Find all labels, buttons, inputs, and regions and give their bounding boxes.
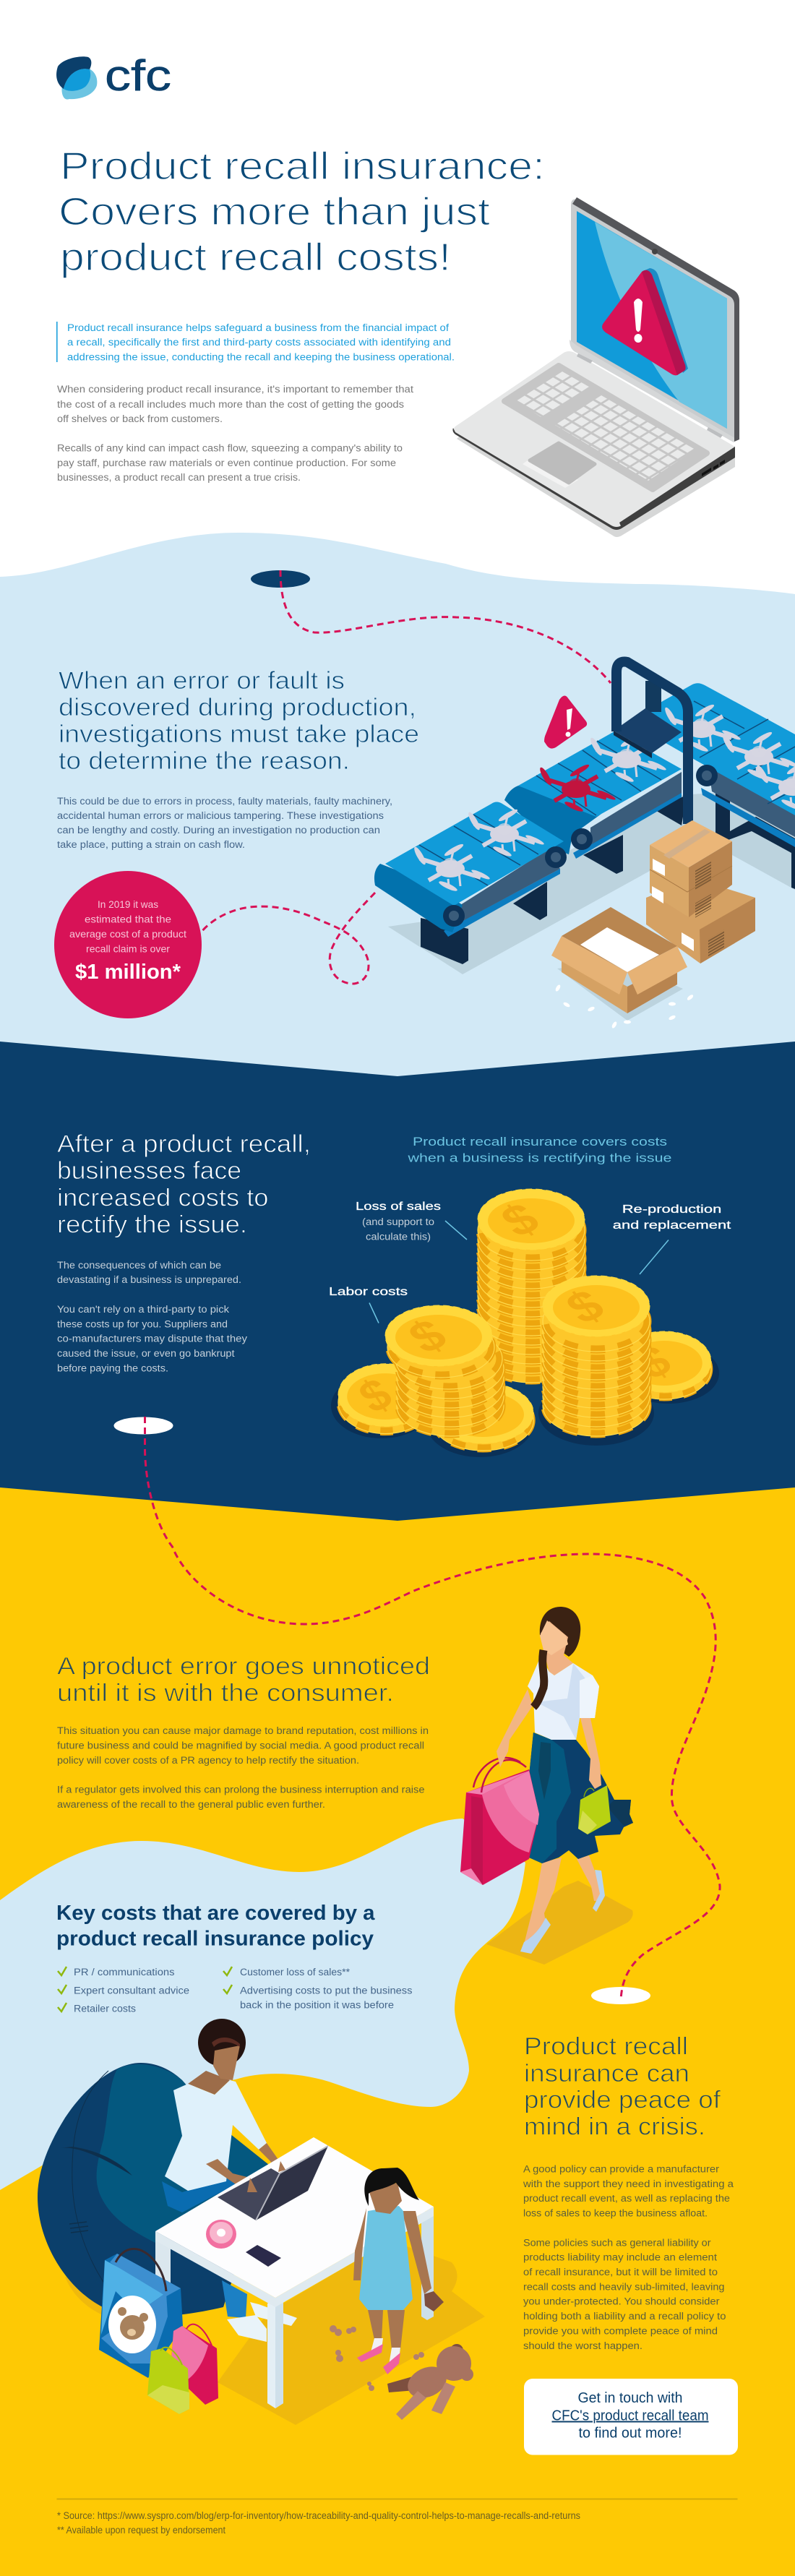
- body: reputation damage text: policy will cover costs of a PR agency to help rectify the situation.: [57, 1755, 359, 1766]
- body: investigation text: can be lengthy and costly. During an investigation no production can: [57, 825, 380, 836]
- mother shirt: [165, 2080, 267, 2191]
- dashed route: conveyor to cost callout: [201, 893, 375, 984]
- label: loss of sales: calculate this): [366, 1232, 431, 1242]
- body: policy text: provide you with complete peace of mind: [523, 2326, 718, 2336]
- light blue blob behind key costs: [0, 1819, 525, 2190]
- heading: product error: A product error goes unnoticed: [57, 1652, 430, 1680]
- mother legs and shoes: [162, 2178, 297, 2342]
- intro body text: the cost of a recall includes much more than the cost of getting the goods: [57, 399, 404, 410]
- intro body text: pay staff, purchase raw materials or even continue production. For some: [57, 458, 396, 468]
- body: policy text: holding both a liability and a recall policy to: [523, 2311, 726, 2322]
- body: consequences text: devastating if a business is unprepared.: [57, 1274, 241, 1285]
- body: investigation text: take place, putting a strain on cash flow.: [57, 839, 245, 850]
- body: reputation damage text: This situation you can cause major damage to brand reputation, cost millions in: [57, 1725, 429, 1736]
- heading: error or fault: discovered during production,: [59, 694, 416, 721]
- body: policy text: of recall insurance, but it will be limited to: [523, 2267, 718, 2277]
- heading: error or fault: When an error or fault is: [59, 667, 345, 695]
- mother arms: [206, 2143, 285, 2192]
- table: [155, 2137, 434, 2408]
- heading: product error: [57, 1652, 430, 1707]
- body: policy text: Some policies such as general liability or: [523, 2238, 711, 2248]
- child: [353, 2168, 444, 2374]
- checklist: key costs: Expert consultant advice: [74, 1985, 189, 1996]
- dashed route: from navy hole to conveyor: [251, 570, 611, 683]
- body: consequences text: [57, 1260, 247, 1373]
- title: Product recall insurance:: [60, 145, 545, 188]
- left coin stack: [385, 1305, 504, 1436]
- callout: $1 million: recall claim is over: [86, 943, 170, 954]
- label: re-production and replacement: Re-production: [622, 1203, 721, 1216]
- body: reputation damage text: [57, 1725, 429, 1810]
- intro body text: off shelves or back from customers.: [57, 413, 223, 424]
- callout: $1 million: $1 million*: [75, 961, 181, 984]
- illustration: conveyor line and boxes: [374, 662, 795, 1029]
- illustration: woman with shopping bags: [460, 1607, 633, 1954]
- body: consequences text: co-manufacturers may dispute that they: [57, 1333, 247, 1344]
- drones on conveyors 1 and 2: [413, 842, 491, 893]
- body: policy text: product recall event, as well as replacing the: [523, 2193, 730, 2204]
- body: consequences text: before paying the costs.: [57, 1363, 168, 1373]
- checklist: key costs: PR / communications: [74, 1967, 175, 1978]
- body: policy text: should the worst happen.: [523, 2340, 643, 2351]
- call to action box: Get in touch with: [578, 2390, 682, 2406]
- label: re-production and replacement: and replacement: [613, 1219, 731, 1232]
- call to action box: CFC's product recall team: [552, 2408, 708, 2424]
- heading: error or fault: to determine the reason.: [59, 747, 350, 775]
- body: investigation text: accidental human errors or malicious tampering. These investigations: [57, 810, 384, 821]
- checklist: key costs: [58, 1967, 413, 2014]
- dashed route: white hole to white hole: [114, 1417, 720, 2004]
- shopping bag small: [578, 1785, 611, 1834]
- heading: error or fault: investigations must take place: [59, 721, 419, 748]
- hair: [540, 1607, 580, 1657]
- call to action box: to find out more!: [578, 2426, 682, 2442]
- heading: after a recall: After a product recall,: [57, 1130, 311, 1158]
- tall coin stack: [478, 1189, 585, 1383]
- stacked boxes: [646, 820, 755, 963]
- intro highlight paragraph: [56, 322, 455, 363]
- icon: warning triangle: [544, 695, 587, 749]
- back leg: [577, 1855, 602, 1901]
- mother neck, face and hair: [188, 2019, 246, 2095]
- heading: after a recall: increased costs to: [57, 1184, 269, 1211]
- intro body text: Recalls of any kind can impact cash flow, squeezing a company's ability to: [57, 442, 403, 454]
- heading: peace of mind: [524, 2032, 721, 2141]
- inspection arch: [614, 662, 688, 824]
- body: policy text: products liability may include an element: [523, 2252, 717, 2262]
- front leg: [525, 1858, 562, 1943]
- callout: $1 million: average cost of a product: [69, 928, 186, 940]
- footnotes: [57, 2510, 580, 2536]
- callout: $1 million: estimated that the: [85, 914, 171, 925]
- shopper floor shadow: [486, 1881, 633, 1965]
- right arm: [580, 1718, 601, 1789]
- label: loss of sales: Loss of sales: [356, 1201, 441, 1213]
- heading: after a recall: rectify the issue.: [57, 1211, 247, 1239]
- skirt: [529, 1733, 633, 1863]
- body: investigation text: This could be due to errors in process, faulty materials, faulty machinery,: [57, 796, 392, 807]
- body: reputation damage text: If a regulator gets involved this can prolong the business interruption and raise: [57, 1784, 425, 1795]
- checklist: key costs: Retailer costs: [74, 2004, 136, 2014]
- green shopping bag: [147, 2348, 189, 2414]
- illustration: coin stacks: [331, 1189, 719, 1457]
- illustration: mother on beanbag with laptop, child and toys: [38, 2019, 485, 2425]
- flat coin bottom: [432, 1383, 533, 1451]
- checklist: key costs: back in the position it was before: [240, 1999, 394, 2011]
- conveyor 1: [374, 802, 567, 964]
- body: consequences text: these costs up for you. Suppliers and: [57, 1318, 228, 1330]
- body: reputation damage text: awareness of the recall to the general public even further.: [57, 1799, 325, 1810]
- heading: after a recall: [57, 1130, 311, 1239]
- title: product recall costs!: [60, 236, 451, 279]
- body: consequences text: The consequences of which can be: [57, 1260, 221, 1271]
- heading: peace of mind: Product recall: [524, 2032, 688, 2060]
- intro highlight paragraph: Product recall insurance helps safeguard a business from the financial impact of: [67, 322, 449, 333]
- body: policy text: A good policy can provide a manufacturer: [523, 2164, 720, 2174]
- heading: peace of mind: provide peace of: [524, 2086, 721, 2113]
- laptop on table: [218, 2146, 328, 2220]
- body: policy text: loss of sales to keep the business afloat.: [523, 2207, 708, 2219]
- body: policy text: recall costs and heavily sub-limited, leaving: [523, 2281, 724, 2293]
- callout: $1 million: [54, 871, 202, 1018]
- flat coin left: [338, 1364, 432, 1434]
- intro body text: When considering product recall insurance, it's important to remember that: [57, 384, 413, 395]
- footnotes: * Source: https://www.syspro.com/blog/erp-for-inventory/how-traceability-and-quality-control-helps-to-manage-recalls-and-returns: [57, 2510, 580, 2521]
- blue shopping bag: [99, 2249, 183, 2378]
- conveyor 3: [630, 683, 795, 889]
- label: loss of sales: [356, 1201, 467, 1242]
- donut: [206, 2220, 236, 2249]
- body: policy text: [523, 2164, 734, 2351]
- back shoe: [593, 1870, 605, 1912]
- label: re-production and replacement: [613, 1203, 731, 1274]
- heading: peace of mind: mind in a crisis.: [524, 2113, 705, 2141]
- body: policy text: with the support they need in investigating a: [523, 2178, 734, 2189]
- body: consequences text: You can't rely on a third-party to pick: [57, 1304, 229, 1315]
- checklist: key costs: Customer loss of sales**: [240, 1967, 351, 1978]
- shirt: [528, 1657, 599, 1740]
- icon: laptop with warning triangle: [452, 197, 739, 537]
- heading: product error: until it is with the consumer.: [57, 1680, 394, 1707]
- intro highlight paragraph: a recall, specifically the first and third-party costs associated with identifying and: [67, 337, 451, 348]
- body: consequences text: caused the issue, or even go bankrupt: [57, 1348, 235, 1359]
- phone: [246, 2245, 281, 2267]
- open box with packing peanuts: [551, 907, 694, 1029]
- intro body text: businesses, a product recall can present a true crisis.: [57, 472, 301, 483]
- label: labor costs: [329, 1286, 408, 1323]
- braid: [533, 1650, 544, 1707]
- right coin stack: [543, 1276, 650, 1436]
- teddy bear: [387, 2344, 473, 2420]
- logo: cfc: cfc: [105, 51, 171, 100]
- conveyor 2: [504, 731, 687, 874]
- neck and face: [541, 1621, 573, 1675]
- footer rule: [56, 2498, 737, 2499]
- beanbag shadow: [65, 2277, 173, 2325]
- heading: error or fault: [59, 667, 419, 775]
- label: loss of sales: (and support to: [362, 1216, 434, 1227]
- body: investigation text: [57, 796, 392, 850]
- body: reputation damage text: future business and could be magnified by social media. A good product recall: [57, 1740, 424, 1751]
- beanbag: [38, 2063, 269, 2317]
- drones on conveyor 3: [663, 703, 742, 753]
- call to action box: [524, 2379, 738, 2455]
- front shoe: [520, 1918, 551, 1954]
- floor shade: [218, 2241, 485, 2425]
- title: [59, 145, 545, 279]
- footnotes: ** Available upon request by endorsement: [57, 2525, 225, 2536]
- checklist: key costs: Advertising costs to put the business: [240, 1985, 413, 1996]
- yellow section background: [0, 1487, 795, 2576]
- subheading: insurance covers costs: when a business is rectifying the issue: [407, 1151, 672, 1165]
- pink shopping bag: [171, 2324, 218, 2405]
- subheading: insurance covers costs: Product recall insurance covers costs: [413, 1135, 667, 1149]
- heading: peace of mind: insurance can: [524, 2060, 689, 2087]
- title: Covers more than just: [59, 190, 490, 233]
- intro body text: [57, 384, 413, 483]
- coin shadows: [331, 1343, 719, 1457]
- heading: key costs: Key costs that are covered by a: [56, 1902, 375, 1925]
- body: policy text: you under-protected. You should consider: [523, 2296, 720, 2307]
- callout: $1 million: In 2019 it was: [98, 898, 158, 910]
- intro highlight paragraph: addressing the issue, conducting the recall and keeping the business operational.: [67, 351, 455, 363]
- heading: key costs: product recall insurance policy: [56, 1927, 374, 1950]
- flat coin right: [617, 1331, 711, 1399]
- light blue wave section background: [0, 533, 795, 1084]
- left arm: [497, 1689, 533, 1767]
- toy crumbs: [330, 2325, 424, 2391]
- heading: key costs: [56, 1902, 375, 1950]
- subheading: insurance covers costs: [407, 1135, 672, 1165]
- heading: after a recall: businesses face: [57, 1157, 241, 1185]
- shopping bag large: [460, 1758, 539, 1885]
- check icons: [58, 1967, 232, 2012]
- logo: cfc: [56, 51, 171, 100]
- navy section background: [0, 1042, 795, 1532]
- floor shadow: [388, 788, 795, 974]
- label: labor costs: Labor costs: [329, 1286, 408, 1298]
